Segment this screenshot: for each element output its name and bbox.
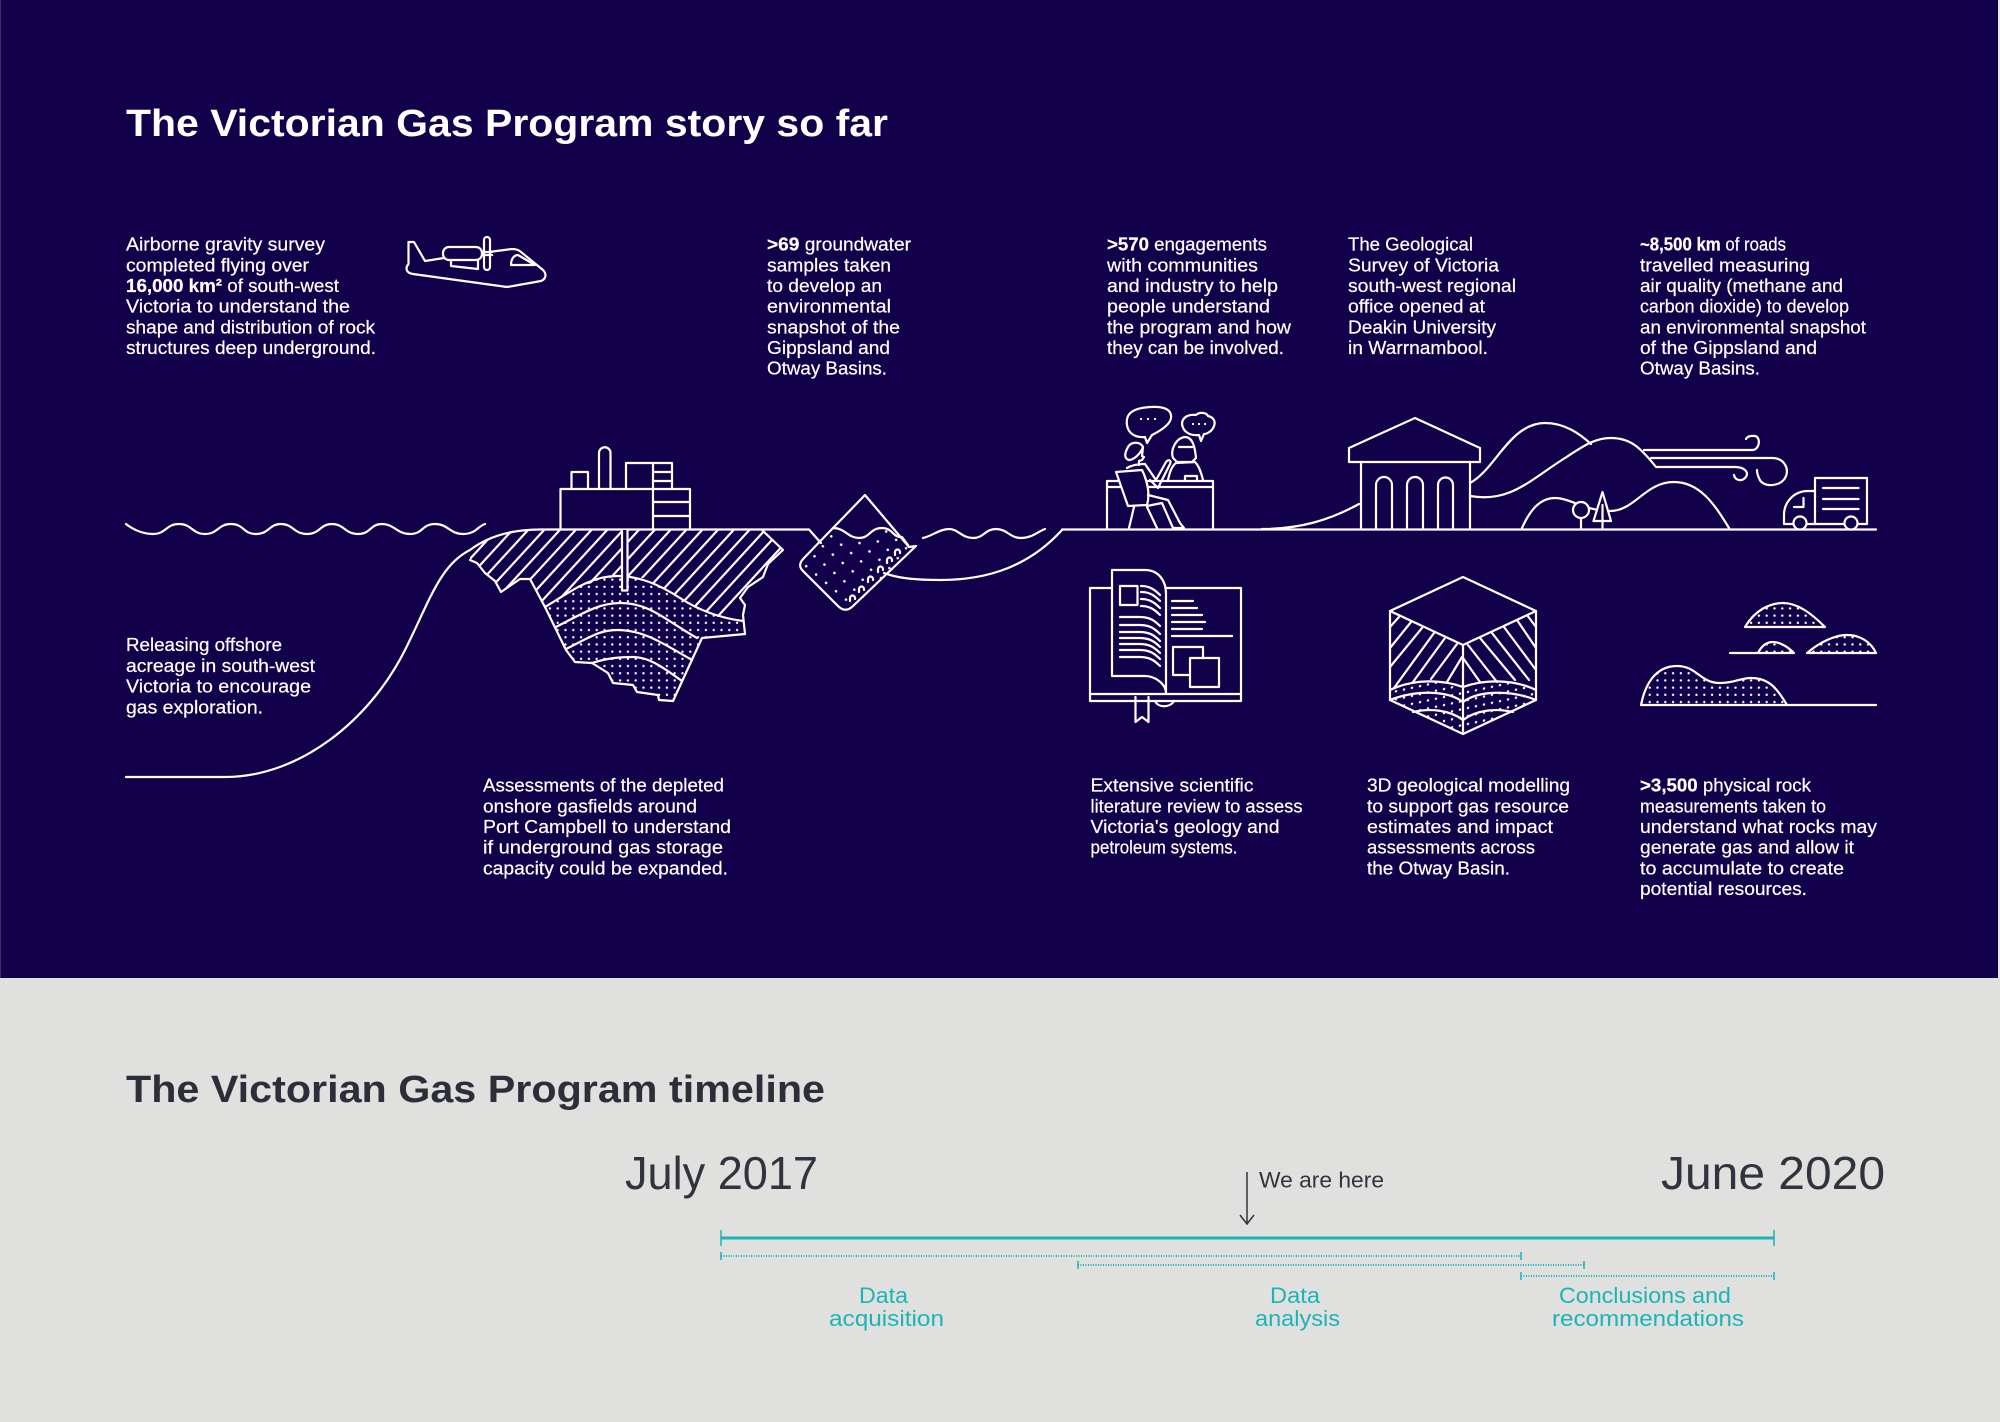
text: depleted gasfields: onshore gasfields around <box>483 796 697 816</box>
text: engagements: >570 engagements <box>1107 235 1267 255</box>
text: engagements: and industry to help <box>1107 276 1278 296</box>
text: depleted gasfields <box>483 776 731 878</box>
label: conclusions and recommendations: Conclusions and <box>1559 1283 1731 1308</box>
icon: open book <box>1090 570 1241 722</box>
label: data acquisition: acquisition <box>829 1306 944 1331</box>
text: literature review: literature review to assess <box>1090 796 1302 816</box>
chart: timeline bars <box>721 1230 1774 1280</box>
icon: regional office building <box>1349 418 1480 529</box>
text: air quality roads: carbon dioxide) to develop <box>1640 297 1849 317</box>
icon: 3D geological cube <box>1390 577 1536 734</box>
text: airborne gravity survey: shape and distribution of rock <box>126 318 376 338</box>
icon: survey truck <box>1784 478 1867 530</box>
text: engagements: people understand <box>1107 297 1270 317</box>
label: data acquisition <box>829 1283 944 1331</box>
illustration: hills and wind <box>1470 423 1787 528</box>
label: data analysis <box>1255 1283 1340 1331</box>
label: conclusions and recommendations: recommendations <box>1552 1306 1744 1331</box>
arrow: current position <box>1240 1172 1254 1224</box>
text: air quality roads: an environmental snapshot <box>1640 318 1866 338</box>
panel: timeline <box>0 978 2000 1422</box>
text: groundwater samples: Gippsland and <box>767 338 890 358</box>
end date: June 2020 <box>1661 1147 1885 1199</box>
text: engagements: with communities <box>1106 255 1258 275</box>
heading: timeline: The Victorian Gas Program timeline <box>126 1069 825 1111</box>
text: airborne gravity survey <box>126 235 376 358</box>
text: engagements <box>1106 235 1292 358</box>
text: literature review: Extensive scientific <box>1090 776 1254 796</box>
text: air quality roads: of the Gippsland and <box>1640 338 1817 358</box>
text: 3D modelling: estimates and impact <box>1367 817 1553 837</box>
text: rock measurements: measurements taken to <box>1640 796 1826 816</box>
text: engagements: they can be involved. <box>1107 338 1284 358</box>
text: rock measurements: >3,500 physical rock <box>1640 776 1812 796</box>
text: airborne gravity survey: structures deep underground. <box>126 338 376 358</box>
illustration: geological cross-section <box>468 530 784 702</box>
text: depleted gasfields: capacity could be expanded. <box>483 858 728 878</box>
text: literature review: petroleum systems. <box>1090 838 1238 858</box>
text: regional office: Survey of Victoria <box>1348 255 1500 275</box>
icon: people in conversation <box>1107 407 1215 529</box>
text: regional office: Deakin University <box>1348 318 1497 338</box>
heading: story so far: The Victorian Gas Program story so far <box>126 103 888 145</box>
text: rock measurements: generate gas and allow it <box>1640 838 1854 858</box>
text: offshore acreage: Releasing offshore <box>126 635 282 655</box>
label: data analysis: analysis <box>1255 1306 1340 1331</box>
callout: we are here: We are here <box>1259 1168 1384 1192</box>
icon: trees <box>1573 492 1611 529</box>
text: rock measurements: potential resources. <box>1640 879 1807 899</box>
text: literature review <box>1090 776 1302 858</box>
text: 3D modelling <box>1367 776 1570 878</box>
illustration: lake bed and river <box>884 504 1876 580</box>
text: air quality roads: air quality (methane and <box>1640 276 1843 296</box>
label: conclusions and recommendations <box>1552 1283 1744 1331</box>
illustration: seafloor and ground line <box>126 530 821 777</box>
text: rock measurements: understand what rocks may <box>1640 817 1878 837</box>
label: data analysis: Data <box>1270 1283 1321 1308</box>
icon: offshore platform <box>560 447 690 529</box>
text: offshore acreage: Victoria to encourage <box>126 677 311 697</box>
icon: rock samples mounds <box>1641 603 1876 705</box>
text: airborne gravity survey: Victoria to understand the <box>126 297 350 317</box>
text: regional office: The Geological <box>1348 235 1473 255</box>
text: regional office <box>1348 235 1516 358</box>
text: airborne gravity survey: completed flying over <box>126 255 309 275</box>
text: 3D modelling: 3D geological modelling <box>1367 776 1570 796</box>
text: offshore acreage <box>126 635 315 717</box>
text: groundwater samples: environmental <box>767 297 891 317</box>
text: airborne gravity survey: 16,000 km² of south-west <box>126 276 339 296</box>
text: engagements: the program and how <box>1107 318 1292 338</box>
text: regional office: in Warrnambool. <box>1348 338 1488 358</box>
text: 3D modelling: the Otway Basin. <box>1367 858 1510 878</box>
text: air quality roads: Otway Basins. <box>1640 359 1760 379</box>
text: groundwater samples: to develop an <box>767 276 882 296</box>
text: offshore acreage: gas exploration. <box>126 697 263 717</box>
label: data acquisition: Data <box>859 1283 909 1308</box>
text: air quality roads: ~8,500 km of roads <box>1640 235 1786 255</box>
text: airborne gravity survey: Airborne gravity survey <box>126 235 326 255</box>
text: depleted gasfields: Port Campbell to understand <box>483 817 731 837</box>
text: groundwater samples: Otway Basins. <box>767 359 887 379</box>
icon: survey plane <box>407 237 545 287</box>
start date: July 2017 <box>625 1147 818 1199</box>
text: depleted gasfields: if underground gas storage <box>483 838 723 858</box>
panel: story so far <box>0 0 2000 978</box>
text: rock measurements <box>1640 776 1878 899</box>
text: groundwater samples <box>767 235 911 379</box>
text: regional office: office opened at <box>1348 297 1485 317</box>
text: regional office: south-west regional <box>1348 276 1516 296</box>
text: groundwater samples: snapshot of the <box>767 318 900 338</box>
text: offshore acreage: acreage in south-west <box>126 656 315 676</box>
text: 3D modelling: to support gas resource <box>1367 796 1569 816</box>
text: depleted gasfields: Assessments of the depleted <box>483 776 724 796</box>
illustration: ocean waves <box>126 524 485 534</box>
text: literature review: Victoria's geology and <box>1090 817 1280 837</box>
text: groundwater samples: samples taken <box>767 255 891 275</box>
text: rock measurements: to accumulate to create <box>1640 858 1844 878</box>
text: air quality roads <box>1640 235 1866 379</box>
text: groundwater samples: >69 groundwater <box>767 235 911 255</box>
icon: groundwater beaker <box>800 495 916 610</box>
text: air quality roads: travelled measuring <box>1640 255 1810 275</box>
text: 3D modelling: assessments across <box>1367 838 1535 858</box>
